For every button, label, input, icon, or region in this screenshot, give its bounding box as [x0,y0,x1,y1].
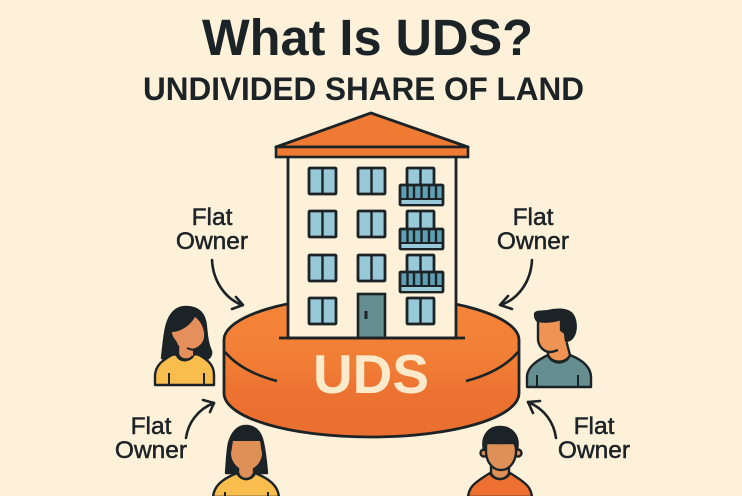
arrow: top right [500,260,532,309]
label: bottom left flat owner [115,413,187,464]
label: top right flat owner: Flat [513,204,554,231]
label: top right flat owner [497,204,569,255]
label: top left flat owner: Owner [176,228,248,255]
arrow: top left [212,260,243,309]
title: What Is UDS? [202,9,533,66]
building base line [279,337,465,339]
door [358,294,385,338]
person: bottom man [468,427,532,496]
label: top right flat owner: Owner [497,228,569,255]
arrow: bottom left [186,400,214,438]
subtitle: UNDIVIDED SHARE OF LAND [143,71,584,107]
label: bottom right flat owner: Owner [558,437,630,464]
label: top left flat owner: Flat [192,204,233,231]
apartment building [276,113,468,338]
roof [276,113,468,147]
label: bottom right flat owner: Flat [574,413,615,440]
label: bottom left flat owner: Owner [115,437,187,464]
building wall [288,156,456,338]
disc label: UDS [313,343,429,405]
person: bottom woman [213,426,279,496]
roof band [276,147,468,157]
label: bottom right flat owner [558,413,630,464]
person: right man [527,310,591,387]
arrow: bottom right [528,401,556,438]
label: bottom left flat owner: Flat [131,413,172,440]
windows [309,168,434,324]
label: top left flat owner [176,204,248,255]
balconies [400,185,443,292]
UDS land disc [224,296,519,437]
person: left woman [155,307,214,385]
